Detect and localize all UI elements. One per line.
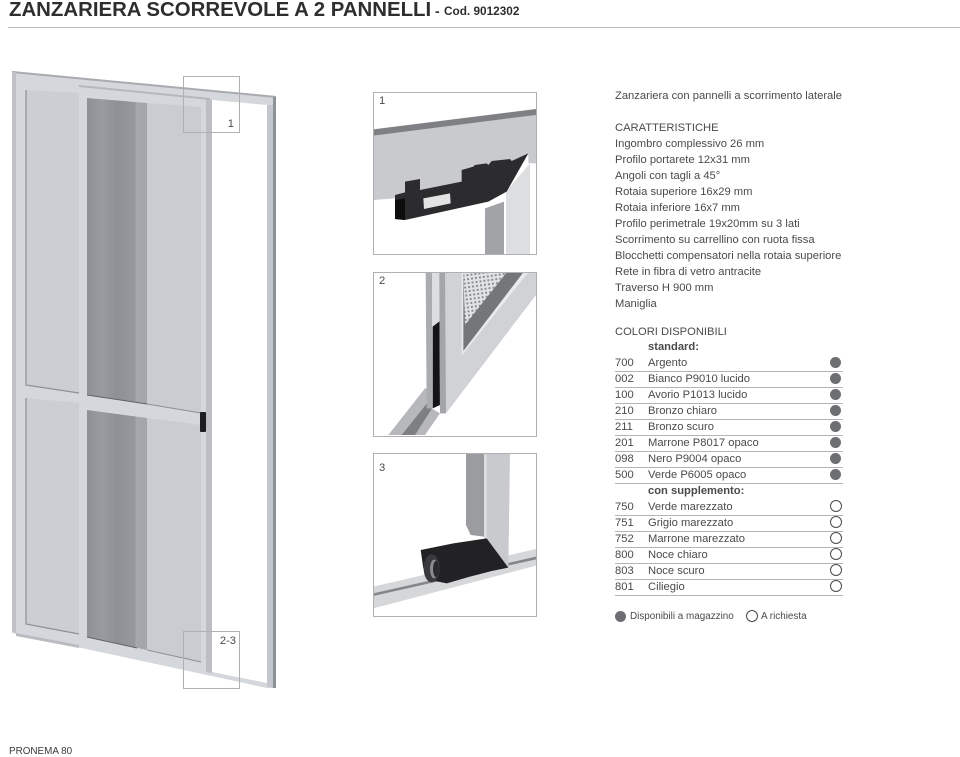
row 801: 801 xyxy=(615,581,634,593)
door frame xyxy=(12,71,276,688)
detail box 1 frame: 1 xyxy=(379,95,385,107)
row 751: Grigio marezzato xyxy=(648,517,733,529)
row 098 xyxy=(615,451,843,468)
row 201: Marrone P8017 opaco xyxy=(648,437,759,449)
colours heading: COLORI DISPONIBILI xyxy=(615,326,727,338)
row 100: 100 xyxy=(615,389,634,401)
row 750 xyxy=(615,499,843,516)
characteristics list: Rotaia inferiore 16x7 mm xyxy=(615,202,740,214)
row 201 xyxy=(615,435,843,452)
row 752: Marrone marezzato xyxy=(648,533,745,545)
legend: on request: A richiesta xyxy=(761,611,807,622)
characteristics list: Rotaia superiore 16x29 mm xyxy=(615,186,752,198)
row 751: 751 xyxy=(615,517,634,529)
row 801: Ciliegio xyxy=(648,581,685,593)
detail box 2 frame xyxy=(373,272,537,437)
illustration: sliding door screen xyxy=(12,71,276,688)
row 500: 500 xyxy=(615,469,634,481)
row 700 xyxy=(615,355,843,372)
text: Cod. 9012302 xyxy=(444,4,519,18)
characteristics list: Traverso H 900 mm xyxy=(615,282,713,294)
row 100 xyxy=(615,387,843,404)
right mesh panels xyxy=(147,103,201,662)
characteristics list: Maniglia xyxy=(615,298,657,310)
detail 1: top rail block xyxy=(374,109,536,254)
characteristics list: Angoli con tagli a 45° xyxy=(615,170,720,182)
detail 2: lower corner xyxy=(388,273,536,435)
row 211 xyxy=(615,419,843,436)
callout box 2-3 xyxy=(183,631,240,689)
row 803: Noce scuro xyxy=(648,565,705,577)
detail box 3 frame xyxy=(373,453,537,617)
row 210: 210 xyxy=(615,405,634,417)
row 800: 800 xyxy=(615,549,634,561)
row 098: 098 xyxy=(615,453,634,465)
characteristics list xyxy=(615,122,841,310)
row 752 xyxy=(615,531,843,548)
row 098: Nero P9004 opaco xyxy=(648,453,741,465)
legend: in stock: Disponibili a magazzino xyxy=(630,611,734,622)
characteristics list: Ingombro complessivo 26 mm xyxy=(615,138,764,150)
row 100: Avorio P1013 lucido xyxy=(648,389,747,401)
row 201: 201 xyxy=(615,437,634,449)
row 700: 700 xyxy=(615,357,634,369)
characteristics list: Rete in fibra di vetro antracite xyxy=(615,266,761,278)
row 751 xyxy=(615,515,843,532)
row 210 xyxy=(615,403,843,420)
header rule xyxy=(8,27,960,28)
footer page label: PRONEMA 80 xyxy=(9,746,72,757)
row 800: Noce chiaro xyxy=(648,549,708,561)
characteristics list: CARATTERISTICHE xyxy=(615,122,719,134)
detail 3: roller xyxy=(374,454,536,608)
center folded pleated mesh xyxy=(87,98,147,650)
row 210: Bronzo chiaro xyxy=(648,405,717,417)
detail box 2 frame: 2 xyxy=(379,275,385,287)
row 700: Argento xyxy=(648,357,687,369)
row 211: 211 xyxy=(615,421,633,433)
row 002: 002 xyxy=(615,373,634,385)
row 500 xyxy=(615,467,843,484)
detail box 1 frame xyxy=(373,92,537,255)
text: - xyxy=(435,3,440,19)
row 750: 750 xyxy=(615,501,634,513)
row 002 xyxy=(615,371,843,388)
supplement subheading: con supplemento: xyxy=(648,485,744,497)
characteristics list: Profilo portarete 12x31 mm xyxy=(615,154,750,166)
characteristics list: Scorrimento su carrellino con ruota fissa xyxy=(615,234,815,246)
detail box 3 frame: 3 xyxy=(379,462,385,474)
handle xyxy=(200,412,206,432)
row 803: 803 xyxy=(615,565,634,577)
row 211: Bronzo scuro xyxy=(648,421,714,433)
legend xyxy=(615,610,807,622)
row 002: Bianco P9010 lucido xyxy=(648,373,750,385)
standard subheading: standard: xyxy=(648,341,699,353)
row 750: Verde marezzato xyxy=(648,501,733,513)
callout box 2-3: 2-3 xyxy=(220,635,236,647)
callout box 1 xyxy=(183,76,240,133)
row 752: 752 xyxy=(615,533,634,545)
callout box 1: 1 xyxy=(228,118,234,130)
intro text: Zanzariera con pannelli a scorrimento laterale xyxy=(615,90,842,102)
row 803 xyxy=(615,563,843,580)
legend: on request xyxy=(746,610,807,622)
row 500: Verde P6005 opaco xyxy=(648,469,746,481)
row 801 xyxy=(615,579,843,596)
row 800 xyxy=(615,547,843,564)
left mesh panels xyxy=(26,90,79,634)
characteristics list: Blocchetti compensatori nella rotaia superiore xyxy=(615,250,841,262)
characteristics list: Profilo perimetrale 19x20mm su 3 lati xyxy=(615,218,800,230)
